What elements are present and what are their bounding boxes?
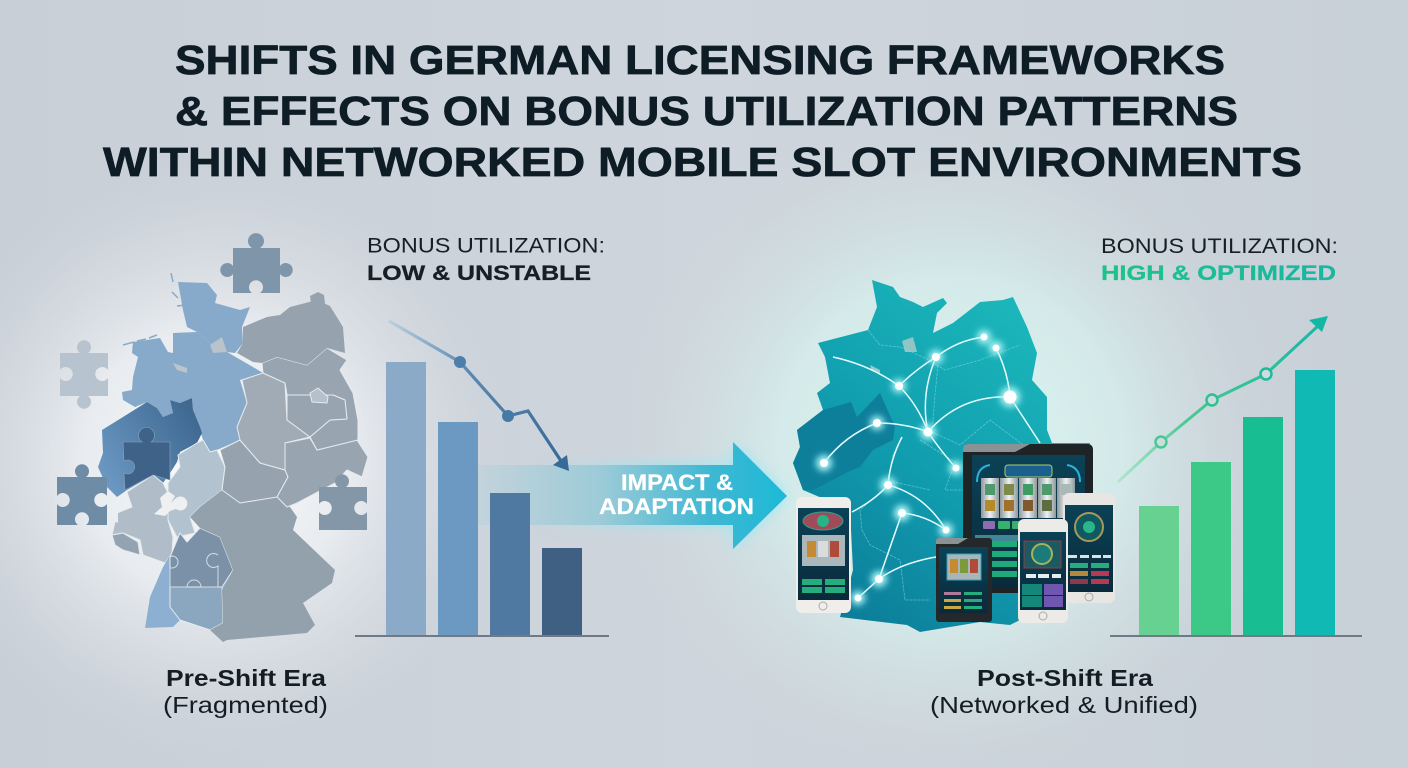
device: middle phone — [1018, 519, 1068, 623]
map: fragmented Germany — [98, 273, 368, 642]
pre-shift caption: (Fragmented) — [163, 692, 328, 718]
puzzle piece: top — [220, 233, 293, 293]
panel: pre-shift fragmented map — [57, 233, 368, 642]
trend line: rising — [1118, 316, 1328, 482]
post-shift caption: Post-Shift Era — [977, 665, 1154, 691]
bar chart: declining bonus utilization — [355, 321, 609, 637]
panel: post-shift networked map — [793, 280, 1115, 632]
pre-shift caption — [163, 665, 328, 718]
arrow label: ADAPTATION — [599, 494, 754, 519]
high utilization label — [1101, 235, 1338, 285]
map: unified Germany — [793, 280, 1090, 632]
arrow label: IMPACT & — [621, 470, 733, 495]
title: & EFFECTS ON BONUS UTILIZATION PATTERNS — [175, 88, 1238, 134]
pre-shift caption: Pre-Shift Era — [166, 665, 327, 691]
high utilization label: HIGH & OPTIMIZED — [1101, 262, 1336, 285]
puzzle outlines: southern state — [170, 554, 218, 587]
impact arrow — [478, 442, 787, 549]
network nodes — [816, 330, 1020, 605]
device: small tablet — [936, 538, 992, 622]
puzzle piece: lower left — [57, 464, 107, 525]
trend line: falling — [389, 321, 569, 471]
low utilization label: BONUS UTILIZATION: — [367, 234, 605, 258]
post-shift caption: (Networked & Unified) — [930, 692, 1198, 718]
piece inside map — [123, 427, 170, 490]
puzzle piece: faded left — [60, 340, 108, 409]
network lines — [824, 337, 1040, 598]
low utilization label — [367, 234, 605, 285]
device: large tablet — [963, 444, 1093, 593]
arrow label — [599, 470, 754, 519]
puzzle piece: right — [319, 474, 367, 530]
title: SHIFTS IN GERMAN LICENSING FRAMEWORKS — [175, 37, 1225, 83]
bar chart: rising bonus utilization — [1110, 316, 1362, 637]
low utilization label: LOW & UNSTABLE — [367, 262, 591, 285]
post-shift caption — [930, 665, 1198, 718]
title: WITHIN NETWORKED MOBILE SLOT ENVIRONMENTS — [103, 139, 1302, 185]
device: left phone — [796, 497, 851, 613]
device: right phone — [1063, 493, 1115, 603]
high utilization label: BONUS UTILIZATION: — [1101, 235, 1338, 258]
title — [103, 37, 1302, 185]
